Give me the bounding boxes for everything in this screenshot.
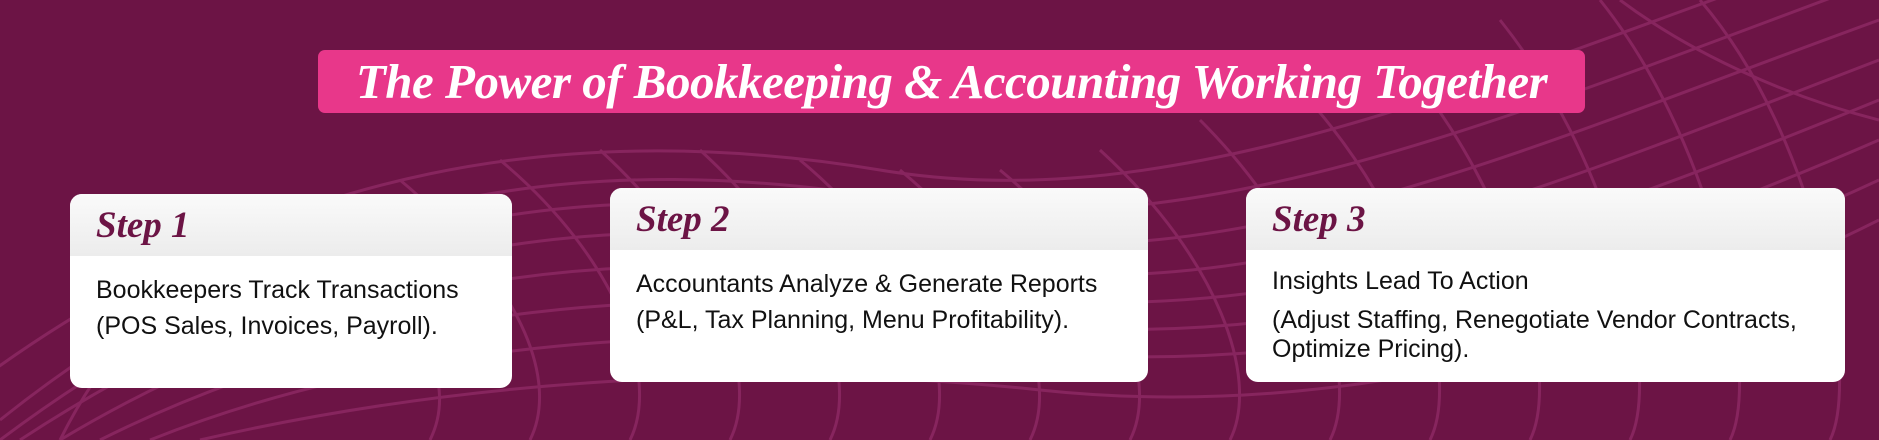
panel: step 1: [70, 194, 512, 388]
heading: step 1: Step 1: [96, 205, 190, 246]
text: step 1 body: [96, 276, 459, 340]
text: step 3 body: Insights Lead To Action (Adjust Staffing, Renegotiate Vendor Contracts,: [1272, 267, 1797, 334]
text: step 3 body: Optimize Pricing).: [1272, 335, 1469, 363]
text: step 2 body: [636, 270, 1097, 334]
panel: step 3: [1246, 188, 1845, 382]
text: step 1 body: Bookkeepers Track Transactions: [96, 276, 459, 304]
text: step 2 body: (P&L, Tax Planning, Menu Profitability).: [636, 306, 1069, 334]
heading: step 3: Step 3: [1272, 199, 1366, 240]
heading: step 2: [610, 188, 1148, 250]
heading: step 2: Step 2: [636, 199, 730, 240]
text: step 2 body: Accountants Analyze & Generate Reports: [636, 270, 1097, 298]
text: step 1 body: (POS Sales, Invoices, Payroll).: [96, 312, 438, 340]
heading: step 1: [70, 194, 512, 256]
heading: step 3: [1246, 188, 1845, 250]
text: step 3 body: [1272, 267, 1797, 363]
panel: step 2: [610, 188, 1148, 382]
title: The Power of Bookkeeping & Accounting Working Together: [356, 54, 1547, 109]
